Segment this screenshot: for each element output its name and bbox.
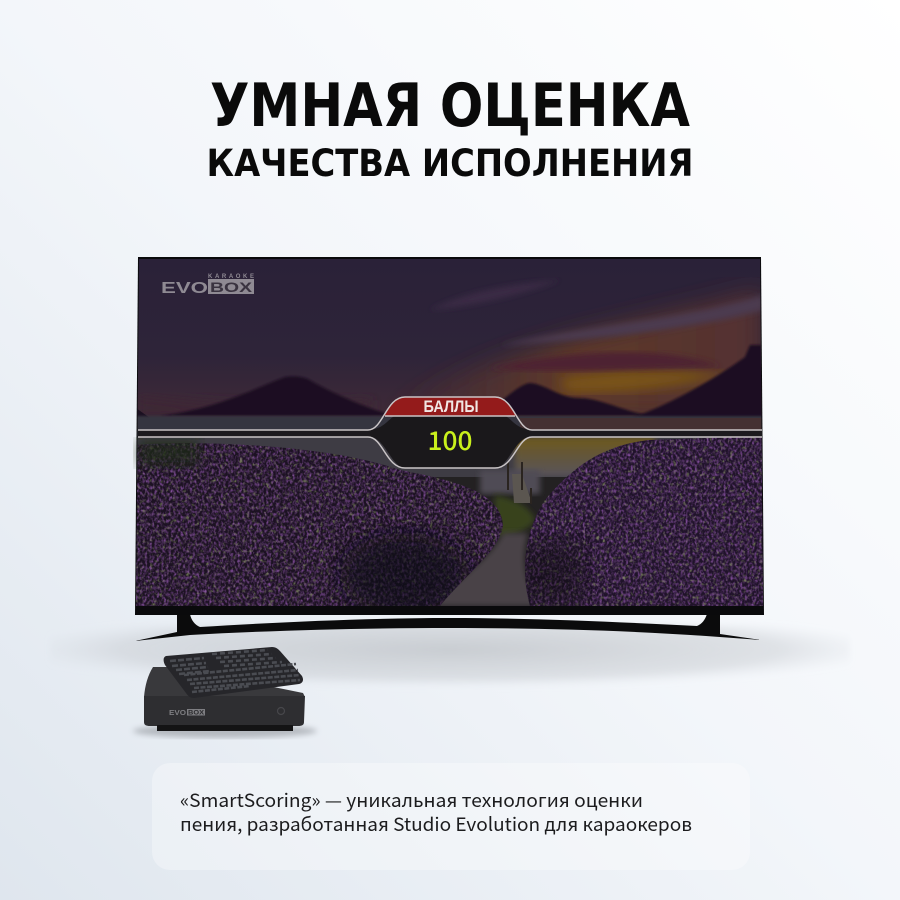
evobox logo xyxy=(161,274,254,297)
sky xyxy=(136,259,764,419)
score: 100 xyxy=(428,421,472,458)
card text xyxy=(180,787,692,837)
far shore reflection xyxy=(136,437,764,477)
footpath xyxy=(440,530,530,606)
box xyxy=(144,667,305,731)
score panel xyxy=(138,397,762,468)
mountains xyxy=(138,344,762,417)
right foliage xyxy=(515,430,765,606)
ground xyxy=(434,477,566,606)
remote xyxy=(164,647,303,698)
box: BOX xyxy=(188,710,204,716)
evobox logo: BOX xyxy=(210,279,253,295)
card background xyxy=(152,763,750,870)
evobox logo: KARAOKE xyxy=(208,274,254,280)
set-top box and remote xyxy=(133,647,317,738)
lake xyxy=(136,416,764,437)
power button xyxy=(278,708,284,714)
panel outline xyxy=(138,397,762,468)
left green bank xyxy=(139,440,199,466)
sunset clouds xyxy=(437,282,761,414)
title: УМНАЯ ОЦЕНКА xyxy=(210,71,690,141)
shore grass xyxy=(495,495,535,536)
pier xyxy=(507,462,532,504)
screen photo xyxy=(136,259,765,617)
tv bezel xyxy=(135,257,764,615)
keys xyxy=(170,650,300,692)
floor shadow xyxy=(50,625,850,695)
centre band xyxy=(138,430,762,437)
card text: «SmartScoring» — уникальная технология оценки xyxy=(180,787,643,813)
subtitle: КАЧЕСТВА ИСПОЛНЕНИЯ xyxy=(206,142,694,185)
label: БАЛЛЫ xyxy=(424,397,478,416)
card text: пения, разработанная Studio Evolution для караокеров xyxy=(180,811,692,837)
left foliage xyxy=(136,438,506,617)
red header xyxy=(384,397,516,416)
tv stand xyxy=(135,614,761,641)
box shadow xyxy=(133,724,317,738)
evobox logo: EVO xyxy=(161,280,208,297)
panel body xyxy=(370,416,530,468)
info card xyxy=(152,763,750,870)
television xyxy=(135,257,765,617)
box logo: EVO xyxy=(169,710,187,717)
